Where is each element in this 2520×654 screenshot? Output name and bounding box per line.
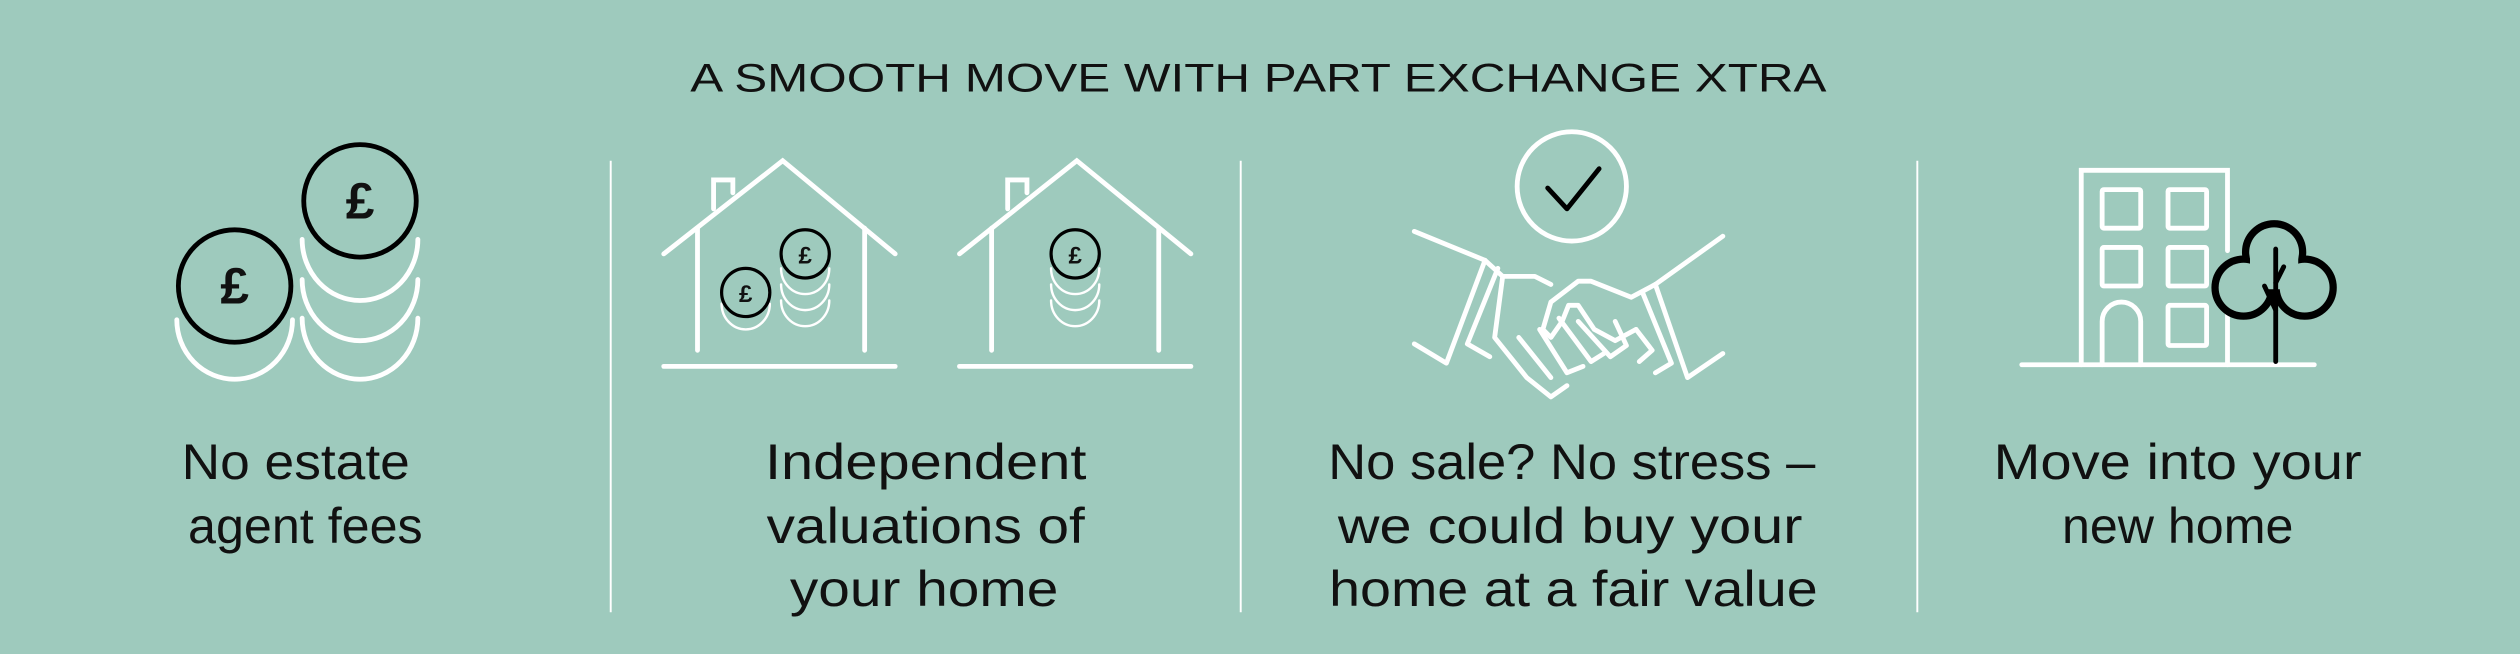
text: no estate agent fees: agent fees [188,498,423,554]
text: move into your new home: Move into your [1994,434,2362,490]
icon: coins: £ [220,257,249,315]
icon: house with one coin stack [959,161,1191,366]
text: no sale no stress: No sale? No stress – [1328,434,1816,490]
icon: house with two coin stacks [664,161,895,366]
text: move into your new home [1994,434,2362,554]
title: A SMOOTH MOVE WITH PART EXCHANGE XTRA [690,56,1827,101]
text: no sale no stress [1328,434,1818,617]
icon: check circle and handshake [1414,132,1723,397]
text: independent valuations: valuations of [767,498,1085,554]
text: no estate agent fees [182,434,423,554]
icon: house with two coin stacks: £ [798,243,812,270]
text: move into your new home: new home [2062,498,2293,554]
icon: building and tree [2022,170,2332,365]
icon: coins: £ [346,172,375,230]
text: no estate agent fees: No estate [182,434,410,490]
icon: house with two coin stacks: £ [739,281,753,308]
text: no sale no stress: we could buy your [1337,498,1802,554]
text: independent valuations: Independent [765,434,1087,490]
text: independent valuations [765,434,1087,617]
icon: house with one coin stack: £ [1068,243,1082,270]
text: no sale no stress: home at a fair value [1329,561,1818,617]
icon: coins [177,145,418,379]
text: independent valuations: your home [790,561,1058,617]
